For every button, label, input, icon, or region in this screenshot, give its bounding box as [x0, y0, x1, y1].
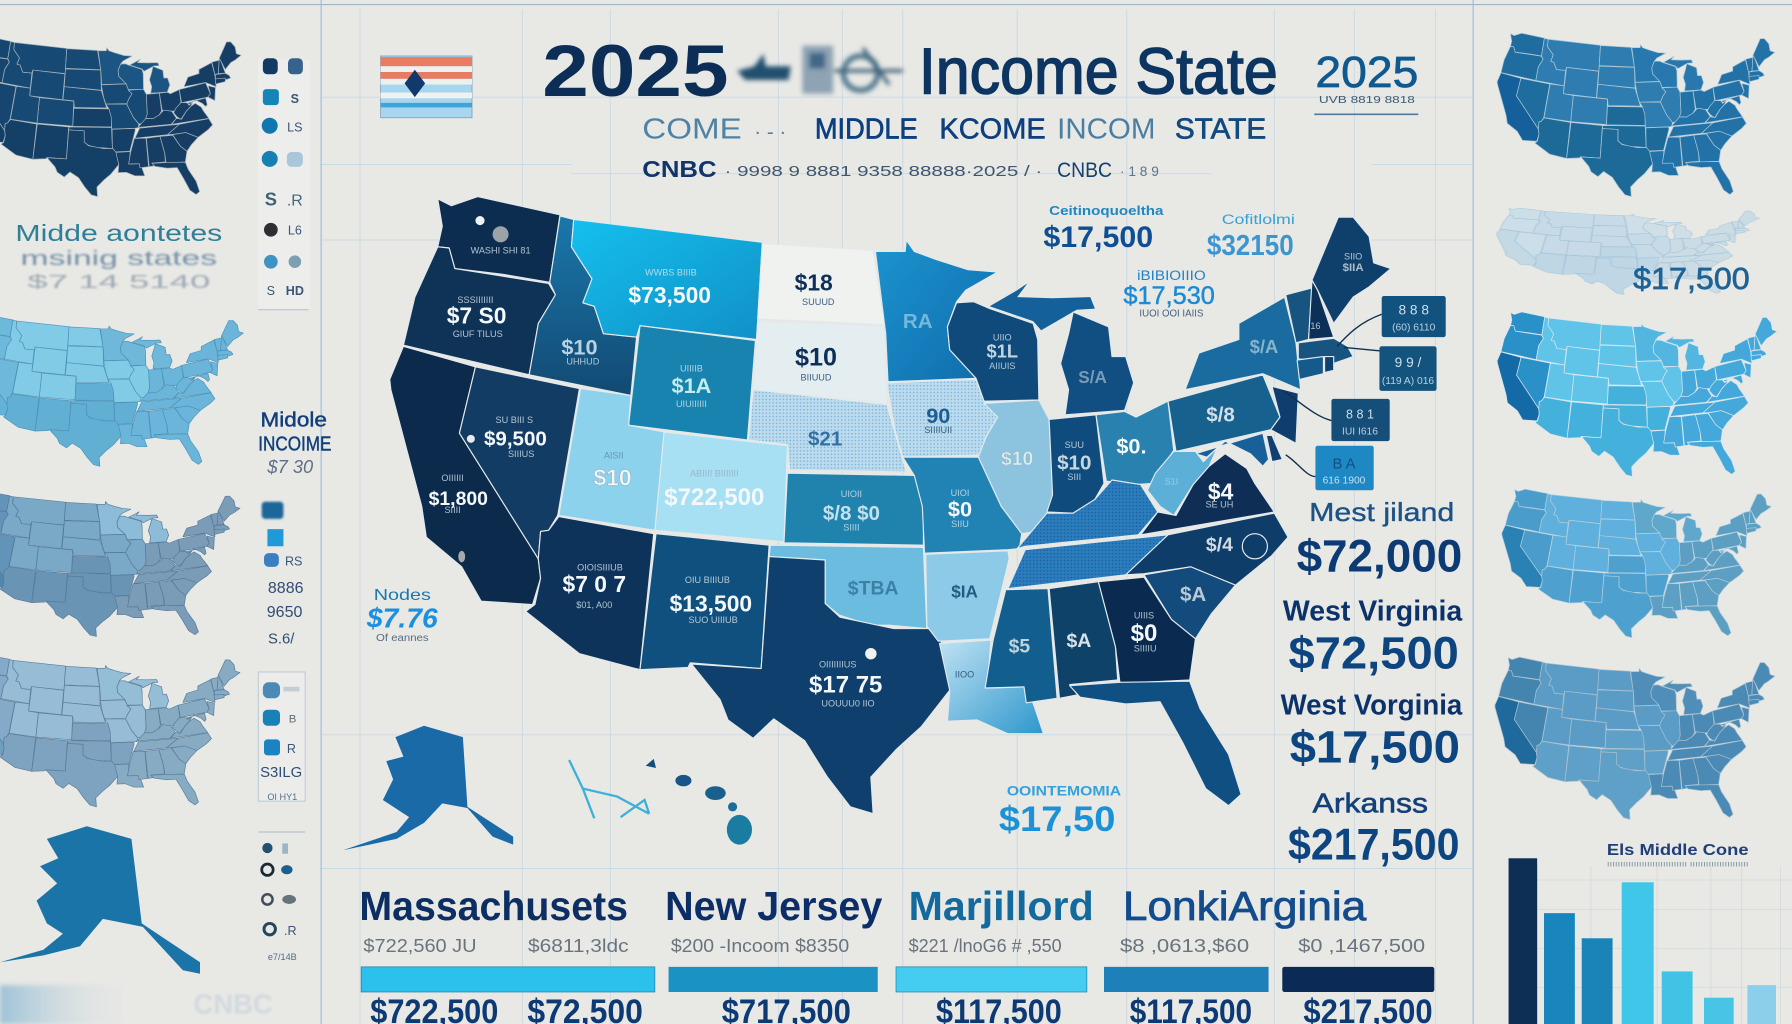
- state labels: $IIA: [1343, 262, 1364, 274]
- state labels: 90: [926, 403, 950, 428]
- source line: CNBC: [1057, 157, 1112, 182]
- legend: lower left box: B: [289, 713, 296, 725]
- state labels: $1A: [672, 373, 712, 398]
- state labels: UOUUU0 IIO: [821, 698, 875, 708]
- callout: bottom $17,50: $17,50: [999, 799, 1115, 839]
- callout boxes with leaders: [1283, 296, 1446, 490]
- state labels: $13,500: [670, 590, 752, 616]
- small values: $6811,3ldc: [528, 935, 629, 956]
- callout box 4: 616 1900: [1323, 475, 1366, 486]
- state labels: $1L: [987, 341, 1018, 362]
- mini map: mid blue: [1497, 33, 1775, 197]
- state labels: $01, A00: [576, 600, 612, 610]
- state labels: AIIUIS: [989, 361, 1015, 371]
- title: Income State: Income State: [919, 35, 1278, 108]
- left text block: Midde aontetes: [15, 220, 222, 246]
- value: $217,500: $217,500: [1288, 820, 1459, 869]
- callout: Nodes $7.76: [366, 587, 438, 644]
- callout box 4: [1315, 446, 1374, 490]
- callout: $17,500 blue: [1043, 204, 1165, 254]
- source line: · 9998 9 8881 9358 88888·2025 / ·: [725, 164, 1042, 180]
- state labels: SIIU: [951, 519, 969, 529]
- callout box 1: 8 8 8: [1398, 302, 1429, 317]
- legend: lower left box: OI HY1: [267, 792, 297, 802]
- state labels: $TBA: [848, 577, 898, 599]
- mini map: dark navy: [0, 37, 241, 197]
- bar chart: [1509, 842, 1792, 1024]
- subtitle: KCOME: [939, 113, 1046, 145]
- legend: middle left: RS: [285, 555, 302, 569]
- mini map: bright blue: [1497, 312, 1777, 477]
- state labels: $/4: [1206, 534, 1233, 556]
- mini map: medium blue: [1502, 489, 1771, 638]
- legend: middle left: [262, 502, 304, 647]
- state labels: WWBS BIIIB: [645, 267, 697, 277]
- state labels: $0: [1131, 620, 1157, 647]
- small values: $722,560 JU: [363, 935, 477, 956]
- state labels: $21: [808, 428, 842, 451]
- source line: CNBC: [642, 156, 717, 182]
- value: $17,500: $17,500: [1633, 261, 1750, 296]
- small values: [363, 935, 1425, 956]
- state labels: OIOISIIIUB: [577, 562, 623, 572]
- state labels: $10: [795, 344, 837, 372]
- legend: bottom left icons: e7/14B: [268, 952, 297, 962]
- small values: $221 /lnoG6 # ,550: [909, 935, 1062, 956]
- state labels: $4: [1208, 478, 1234, 504]
- value: $17,500: $17,500: [1290, 721, 1460, 772]
- subtitle: · - ·: [754, 120, 786, 143]
- text block: Middle Income: $7 30: [266, 456, 313, 477]
- legend: top left icons: S: [265, 189, 277, 210]
- subtitle: STATE: [1175, 113, 1266, 145]
- state labels: $10: [594, 465, 632, 491]
- subtitle: [642, 113, 1266, 145]
- subtitle: INCOM: [1057, 113, 1155, 145]
- value: Mest jiland: Mest jiland: [1309, 497, 1454, 527]
- state labels: $722,500: [664, 484, 764, 511]
- state labels: UIOII: [841, 489, 862, 499]
- callout: Nodes $7.76: Nodes: [374, 587, 431, 604]
- state labels: $9,500: [484, 428, 547, 451]
- state labels: $/A: [1250, 336, 1278, 357]
- state name: Massachusets: Massachusets: [359, 883, 628, 929]
- mini map: steel blue: [0, 491, 240, 637]
- callout: $17,530: IUOI OOI IAIIS: [1139, 309, 1204, 320]
- callout: bottom $17,50: [999, 783, 1121, 839]
- state labels: SIIIIU: [1134, 643, 1157, 653]
- state labels: UIUIIIIII: [676, 399, 707, 409]
- state labels: ABIIII BIIIIIII: [690, 469, 739, 479]
- state labels: $A: [1066, 630, 1091, 652]
- legend: top left icons: S: [267, 284, 275, 298]
- panel: right column maps: [1495, 33, 1777, 819]
- state labels: $7 S0: [447, 302, 506, 328]
- mini map: light blue: [0, 315, 243, 466]
- left text block: [15, 220, 222, 292]
- callout: $17,530: iBIBIOIIIO: [1137, 268, 1206, 283]
- state labels: S1I: [1165, 477, 1178, 487]
- callout box 2: [1379, 346, 1437, 391]
- state labels: 16: [1310, 321, 1321, 331]
- legend: middle left: 8886: [268, 580, 304, 597]
- state labels: $5: [1009, 636, 1030, 658]
- state name: New Jersey: New Jersey: [665, 883, 882, 929]
- legend: top left icons: .R: [287, 193, 303, 210]
- state labels: SIIII: [843, 522, 860, 532]
- map: Hawaii: [569, 759, 752, 845]
- legend: bottom left icons: .R: [284, 924, 297, 938]
- badge: 2025: UVB 8819 8818: [1319, 95, 1415, 106]
- state labels: SIIO: [1344, 251, 1362, 261]
- state labels: $18: [795, 269, 833, 295]
- callout: bottom $17,50: OOINTEMOMIA: [1007, 783, 1121, 798]
- state labels: $A: [1180, 583, 1206, 606]
- state labels: UIIIIB: [680, 363, 703, 373]
- callout: $17,500 blue: Ceitinoquoeltha: [1049, 204, 1165, 218]
- state labels: $10: [1001, 448, 1033, 470]
- state labels: OIU BIIIUB: [685, 575, 730, 585]
- state labels: $10: [561, 334, 598, 359]
- callout box 3: 8 8 1: [1346, 407, 1374, 421]
- state labels: UHHUD: [566, 357, 600, 367]
- callout: $32150: Cofitlolmi: [1222, 212, 1295, 227]
- small values: $200 -Incoom $8350: [671, 935, 849, 956]
- icon: flag: [381, 56, 472, 118]
- title: [542, 31, 1278, 112]
- state labels: BIIUUD: [801, 373, 832, 383]
- badge: 2025: 2025: [1315, 49, 1418, 97]
- smudged title glyphs: [737, 46, 903, 94]
- value bars: [361, 967, 1434, 992]
- text block: Middle Income: [258, 408, 331, 477]
- state labels: $0.: [1116, 434, 1147, 459]
- source line: [642, 156, 1159, 182]
- legend: top left icons: HD: [286, 284, 304, 298]
- value: $72,000: $72,000: [1297, 530, 1462, 581]
- mini map: slate blue: [1495, 657, 1775, 819]
- faded text: CNBC: CNBC: [194, 989, 273, 1020]
- state labels: WASHI SHI 81: [471, 246, 531, 256]
- legend: lower left box: [258, 672, 305, 802]
- value: Arkanss: Arkanss: [1313, 788, 1428, 819]
- source line: · 1 8 9: [1120, 164, 1159, 179]
- grid lines: [321, 9, 1472, 1024]
- callout: $17,530: [1123, 268, 1215, 320]
- state labels: SIIII: [444, 505, 461, 515]
- state labels: $1,800: [429, 488, 488, 510]
- state labels: RA: [903, 310, 933, 333]
- state labels: SIIIUS: [508, 449, 534, 459]
- subtitle: MIDDLE: [815, 113, 918, 145]
- state labels: $17 75: [809, 672, 882, 699]
- callout box 2: (119 A) 016: [1382, 376, 1434, 387]
- callout: $17,500 blue: $17,500: [1043, 221, 1153, 254]
- text block: Middle Income: INCOIME: [258, 432, 331, 455]
- state labels: SIII: [1067, 472, 1081, 482]
- panel: left column maps: [0, 37, 273, 1024]
- state labels: GIUF TILUS: [453, 329, 503, 339]
- title: 2025: 2025: [542, 31, 729, 112]
- callout: $17,530: $17,530: [1123, 282, 1215, 310]
- smudge corner: [0, 985, 137, 1024]
- subtitle: COME: [642, 113, 742, 145]
- state labels: SIIIIUII: [924, 425, 952, 435]
- state labels: SU BIII S: [496, 415, 533, 425]
- state labels: $/8 $0: [823, 502, 880, 525]
- callout box 2: 9 9 /: [1395, 355, 1422, 370]
- callout: $32150: [1207, 212, 1295, 262]
- state labels: SSSIIIIIII: [457, 295, 493, 305]
- callout box 3: IUI I616: [1342, 426, 1378, 437]
- small values: $8 ,0613,$60: [1120, 935, 1249, 956]
- badge: 2025: [1314, 49, 1418, 114]
- value: West Virginia: West Virginia: [1283, 596, 1463, 628]
- legend: middle left: S.6/: [268, 631, 295, 647]
- bar values: [370, 993, 1433, 1024]
- callout: Nodes $7.76: Of eannes: [376, 633, 429, 644]
- chart title: Els Middle Cone: [1607, 842, 1749, 859]
- callout: Nodes $7.76: $7.76: [366, 602, 438, 633]
- left text block: msinig states: [21, 247, 217, 270]
- map: Alaska: [343, 726, 513, 850]
- value: $72,500: $72,500: [1289, 628, 1459, 679]
- state labels: OIIIIII: [441, 473, 464, 483]
- state labels: $73,500: [628, 282, 711, 308]
- mini map: blurred sketch: [1497, 208, 1760, 294]
- mini map: Alaska: [0, 826, 200, 974]
- state labels: UIIIS: [1134, 610, 1154, 620]
- mini map: pale steel: [0, 655, 240, 807]
- state labels: UIOI: [951, 488, 969, 498]
- legend: top left icons: LS: [287, 120, 303, 134]
- legend: lower left box: R: [287, 742, 296, 756]
- value: West Vorginia: West Vorginia: [1281, 689, 1463, 721]
- state labels: UIIO: [993, 333, 1012, 343]
- legend: top left icons: S: [291, 92, 299, 106]
- legend: top left icons: L6: [288, 223, 302, 237]
- state labels: SUO UIIIUB: [689, 615, 738, 625]
- bottom row: state comparison: [359, 883, 1434, 1024]
- text block: Middle Income: Midole: [261, 408, 327, 431]
- state labels: [429, 216, 1364, 708]
- callout: $32150: $32150: [1207, 230, 1294, 262]
- state labels: $IA: [951, 582, 978, 602]
- state labels: AISII: [604, 450, 624, 460]
- right text block: state values: [1281, 497, 1463, 869]
- main map: [390, 197, 1391, 814]
- state labels: SUU: [1065, 440, 1084, 450]
- callout box 3: [1331, 399, 1390, 441]
- state labels: IIOO: [955, 670, 974, 680]
- state shapes: [390, 197, 1391, 814]
- state labels: SE UH: [1205, 499, 1233, 509]
- state labels: SUUUD: [802, 297, 835, 307]
- legend: bottom left icons: [258, 832, 305, 962]
- callout box 4: B A: [1332, 457, 1356, 473]
- state labels: $/8: [1206, 404, 1235, 427]
- state labels: $7 0 7: [563, 571, 626, 597]
- state labels: $0: [948, 497, 972, 522]
- state name: Marjillord: Marjillord: [909, 883, 1094, 929]
- state name: LonkiArginia: LonkiArginia: [1123, 883, 1366, 929]
- small values: $0 ,1467,500: [1298, 935, 1425, 956]
- legend: middle left: 9650: [267, 604, 302, 621]
- left text block: $7 14 5140: [27, 271, 210, 292]
- chart subtitle: IIIIIIIIIIIIIIIIIIIIIIIIIIIIII IIIIIIIIIIIIIIIIIIIIII: [1607, 861, 1749, 868]
- state labels: OIIIIIIIUS: [819, 659, 856, 669]
- callout box 1: (60) 6110: [1392, 322, 1436, 333]
- state labels: S/A: [1078, 367, 1107, 387]
- callout box 1: [1382, 296, 1446, 337]
- legend: top left icons: [258, 58, 310, 310]
- legend: lower left box: S3ILG: [260, 765, 302, 781]
- state labels: $10: [1057, 452, 1091, 475]
